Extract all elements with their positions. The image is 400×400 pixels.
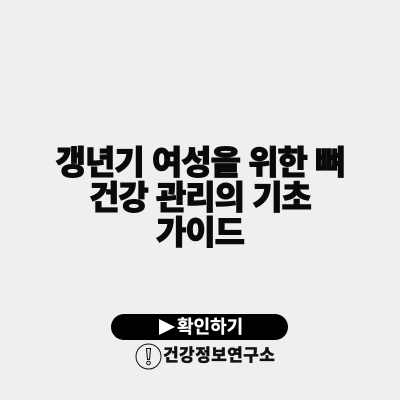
brand name: 건강정보연구소 [163, 346, 275, 365]
title: 건강 관리의 기초 [89, 179, 311, 216]
title: 갱년기 여성을 위한 뼈 [56, 144, 344, 181]
icon: exclamation circle [136, 344, 162, 370]
title [56, 144, 344, 251]
title: 가이드 [156, 214, 244, 251]
button: confirm [111, 314, 288, 340]
button: confirm: 확인하기 [177, 317, 243, 337]
